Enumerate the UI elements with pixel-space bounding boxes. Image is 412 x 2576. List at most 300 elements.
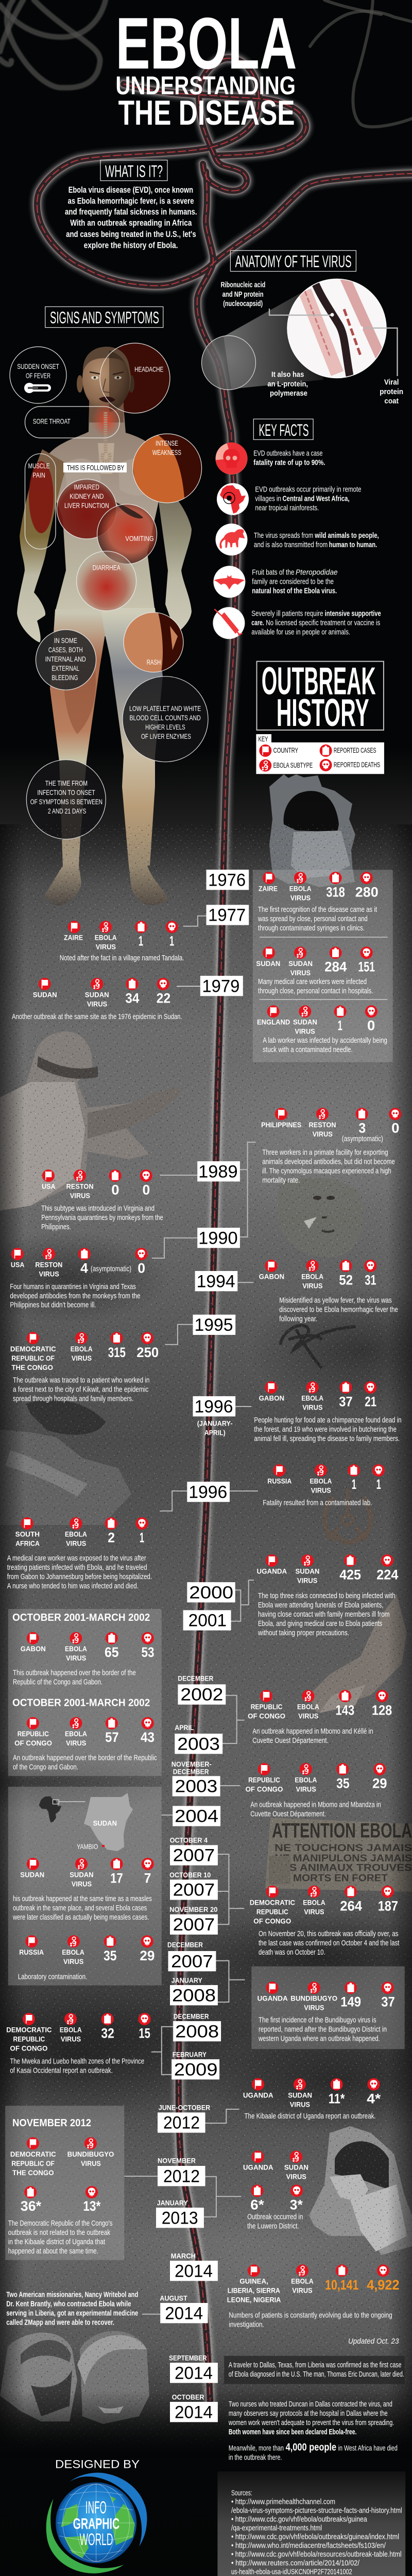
- entry: Zaire 1976: 318: [326, 885, 345, 900]
- icon: bat: [213, 566, 245, 598]
- fact: fatality rate: [253, 449, 325, 467]
- year: September 2014: SEPTEMBER: [169, 2353, 207, 2362]
- entry: Republic of Congo 2002-2003: Cuvette Ouest Département.: [252, 1737, 329, 1745]
- entry: Zaire 1977: EBOLA: [95, 934, 117, 942]
- photo: attention ebola sign: NE TOUCHONS JAMAIS: [274, 1843, 412, 1854]
- entry: DRC 2008-2009: VIRUS: [61, 2035, 81, 2043]
- heading: signs and symptoms: SIGNS AND SYMPTOMS: [50, 308, 159, 327]
- entry: Republic of Congo 2001: EBOLA: [65, 1730, 87, 1738]
- entry: DRC 1995: THE CONGO: [11, 1363, 53, 1371]
- connector 2004: [162, 1815, 173, 1816]
- entry: Russia 1996: EBOLA: [310, 1477, 332, 1485]
- year: June-October 2012: 2012: [163, 2113, 200, 2133]
- entry: Gabon 2001: [12, 1612, 154, 1686]
- symptom: muscle pain: PAIN: [32, 471, 45, 479]
- entry: DRC 2007: EBOLA: [303, 1898, 325, 1906]
- entry: England 1976: VIRUS: [295, 1027, 315, 1035]
- entry: USA 1990: VIRUS: [39, 1270, 59, 1278]
- callout: nucleocapsid: and NP protein: [222, 290, 264, 299]
- symptom: bleeding: BLEEDING: [52, 673, 78, 682]
- panel: November 2012 DRC: happened at about the same time.: [8, 2247, 98, 2256]
- entry: Uganda 2000-2001: SUDAN: [296, 1567, 319, 1575]
- logo: info graphic world: INFO: [85, 2498, 107, 2517]
- fact: fruit bats: Fruit bats of the: [252, 568, 294, 577]
- entry: Sudan 2004: VIRUS: [72, 1879, 92, 1888]
- entry: Zaire 1977: VIRUS: [96, 943, 116, 951]
- entry: Republic of Congo 2001: VIRUS: [66, 1739, 86, 1747]
- throat and trachea: [92, 402, 121, 461]
- entry: Uganda November 2012: [243, 2150, 308, 2230]
- year: December 2008: 2008: [175, 2022, 219, 2041]
- entry: Republic of Congo 2002-2003: VIRUS: [298, 1711, 318, 1720]
- entry: DRC 2008-2009: The Mweka and Luebo health zones of the Province: [10, 2057, 144, 2065]
- year: January 2008: 2008: [172, 1986, 216, 2005]
- entry: Republic of Congo 2001: 57: [105, 1730, 119, 1745]
- entry: USA 1989: RESTON: [66, 1182, 94, 1191]
- entry: October 2014 nurses: [228, 2400, 398, 2462]
- big circle outline: [287, 279, 386, 378]
- symptom: diarrhea: [77, 551, 136, 611]
- fact: supportive care: available for use in people or animals.: [251, 628, 350, 636]
- entry: Republic of Congo 2001: REPUBLIC: [18, 1730, 49, 1738]
- entry: DRC 2007: 187: [378, 1898, 398, 1913]
- entry: Uganda June-October 2012: UGANDA: [243, 2091, 273, 2099]
- entry: DRC 1995: DEMOCRATIC: [10, 1345, 56, 1353]
- entry: West Africa March 2014: VIRUS: [292, 2286, 313, 2295]
- entry: Republic of Congo Nov-Dec 2003: 35: [336, 1775, 350, 1791]
- fact: central and west africa: [255, 485, 362, 512]
- connector 2007: [218, 1854, 244, 1924]
- entry: Philippines 1989: (asymptomatic): [342, 1135, 383, 1143]
- entry: Sudan 1976: VIRUS: [290, 969, 311, 977]
- entry: Gabon 1996: EBOLA: [301, 1394, 323, 1402]
- entry: Gabon 1994: [259, 1260, 398, 1323]
- entry: USA 1989: USA: [42, 1182, 56, 1191]
- panel: Uganda Bundibugyo 2007-2008: [251, 1967, 405, 2049]
- logo: info graphic world: [46, 2473, 147, 2573]
- entry: DRC 1995: 315: [108, 1345, 126, 1360]
- entry: Zaire 1977: 1: [169, 934, 174, 949]
- entry: Zaire 1976: ZAIRE: [259, 884, 278, 892]
- symptom: bleeding: EXTERNAL: [52, 664, 79, 672]
- entry: DRC 1995: [10, 1332, 159, 1403]
- panel: anatomy of the virus: [202, 250, 403, 405]
- entry: West Africa March 2014: LEONE, NIGERIA: [227, 2296, 281, 2304]
- entry: DRC 2007: death was on October 10.: [259, 1948, 325, 1957]
- entry: South Africa 1996: VIRUS: [66, 1539, 86, 1548]
- symptom: bleeding: IN SOME: [54, 636, 77, 645]
- panel: October 2001 to March 2002: [8, 1609, 162, 1776]
- symptom: intense weakness: INTENSE: [156, 439, 178, 447]
- photo: attention ebola sign: LES ANIMAUX TROUVES: [274, 1863, 412, 1874]
- icon: africa map: [217, 483, 249, 515]
- year: 1996 January-April: APRIL): [204, 1428, 226, 1436]
- heading: key facts: KEY FACTS: [259, 421, 309, 439]
- connector 1996 both sides: [160, 1491, 258, 1511]
- entry: Republic of Congo 2002-2003: 143: [336, 1702, 354, 1718]
- year: 2004: 2004: [175, 1807, 218, 1826]
- entry: England 1976: 0: [367, 1018, 375, 1033]
- entry: Gabon 2001: Republic of the Congo and Gabon.: [13, 1678, 102, 1686]
- entry: South Africa 1996: EBOLA: [65, 1530, 87, 1538]
- icon: syringe: [213, 607, 245, 639]
- year: 1977: 1977: [208, 906, 246, 925]
- fact: fatality rate: fatality rate of up to 90%.: [253, 458, 325, 467]
- entry: Republic of Congo 2002-2003: OF CONGO: [248, 1711, 285, 1720]
- year: October 2014: 2014: [175, 2402, 213, 2422]
- year: August 2014: 2014: [165, 2303, 203, 2323]
- entry: USA 1989: 0: [111, 1182, 119, 1197]
- entry: Philippines 1989: PHILIPPINES: [261, 1121, 301, 1129]
- entry: Republic of Congo Nov-Dec 2003: 29: [372, 1775, 387, 1791]
- year: November-December 2003: [171, 1760, 220, 1797]
- intro text: as Ebola hemorrhagic fever, is a severe: [68, 196, 194, 206]
- entry: Uganda 2000-2001: without taking proper precautions.: [258, 1629, 349, 1637]
- symptom: vomiting: [97, 502, 157, 564]
- heading: designed by: DESIGNED BY: [55, 2458, 140, 2471]
- entry: South Africa 1996: treating patients infected with Ebola, and he traveled: [7, 1564, 147, 1572]
- fact: wild animals: and is also transmitted from: [254, 540, 328, 549]
- year: December 2007: [167, 1940, 216, 1971]
- entry: USA 1989: Pennsylvania quarantines by monkeys from the: [41, 1214, 163, 1222]
- entry: USA 1989: This subtype was introduced in Virginia and: [41, 1205, 154, 1213]
- year: December 2002: [178, 1674, 226, 1705]
- connector 2007-2008: [216, 1961, 245, 2002]
- legend: key: [256, 734, 384, 774]
- entry: Uganda 2000-2001: Ebola were attending funerals of Ebola patients,: [258, 1601, 383, 1609]
- entry: Republic of Congo Nov-Dec 2003: VIRUS: [296, 1785, 316, 1793]
- entry: Republic of Congo 2002-2003: 128: [372, 1702, 392, 1718]
- symptom: incubation time: THE TIME FROM: [45, 779, 88, 787]
- symptom: intense weakness: [132, 433, 202, 503]
- panel: November 2012 DRC: in the Kibaale district of Uganda that: [8, 2238, 105, 2246]
- entry: Sudan 2004: 7: [144, 1870, 151, 1886]
- entry: Sudan 1979: SUDAN: [85, 990, 109, 998]
- entry: Sudan 2004: SUDAN: [20, 1870, 44, 1878]
- year: April 2003: 2003: [177, 1734, 220, 1754]
- year: January 2008: [170, 1976, 218, 2005]
- panel: November 2012 DRC: The Democratic Republic of the Congo's: [8, 2219, 112, 2228]
- icon: thermometer: [24, 383, 51, 393]
- entry: Zaire 1976: [258, 872, 379, 933]
- entry: Uganda June-October 2012: VIRUS: [290, 2100, 310, 2108]
- intro text: With an outbreak spreading in Africa: [70, 218, 192, 228]
- entry: Zaire 1976: was spread by close, personal contact and: [258, 915, 368, 923]
- symptom: impaired kidney and liver function: KIDNEY AND: [70, 492, 104, 500]
- panel: Uganda Bundibugyo 2007-2008: western Uganda where an outbreak happened.: [258, 2035, 380, 2043]
- entry: Gabon 2001: 53: [141, 1645, 154, 1660]
- entry: Zaire 1976: The first recognition of the disease came as it: [258, 906, 377, 914]
- symptom: sudden onset of fever: SUDDEN ONSET: [17, 362, 59, 370]
- entry: DRC 2007: 264: [340, 1898, 362, 1913]
- entry: Sudan 2004: 17: [110, 1870, 123, 1886]
- entry: South Africa 1996: 1: [140, 1530, 144, 1546]
- entry: Sudan 1979: SUDAN: [33, 990, 57, 998]
- entry: DRC 1995: a forest next to the city of Kikwit, and the epidemic: [13, 1385, 148, 1394]
- year: December 2002: DECEMBER: [178, 1674, 213, 1683]
- symptom: impaired kidney and liver function: [57, 479, 116, 539]
- entry: Philippines 1989: 3: [358, 1121, 366, 1136]
- entry: Russia 2004: VIRUS: [63, 1957, 83, 1965]
- symptom: low platelet counts: [123, 676, 208, 762]
- panel: November 2012 DRC: VIRUS: [81, 2159, 101, 2167]
- panel: November 2012 DRC: 36*: [21, 2198, 42, 2214]
- entry: Gabon 2001: EBOLA: [65, 1645, 87, 1653]
- connector 2002-2003: [222, 1696, 244, 1743]
- entry: Philippines 1989: mortality rate.: [262, 1177, 300, 1185]
- entry: USA 1990: (asymptomatic): [91, 1265, 131, 1274]
- entry: DRC 1995: REPUBLIC OF: [11, 1354, 55, 1362]
- entry: West Africa March 2014: investigation.: [229, 2320, 264, 2329]
- panel: Dallas traveler September 2014: [224, 2356, 405, 2384]
- year: November 20 2007: NOVEMBER 20: [169, 1905, 218, 1913]
- entry: Sudan 2004: SUDAN: [70, 1870, 94, 1878]
- panel: Uganda Bundibugyo 2007-2008: VIRUS: [304, 2004, 324, 2012]
- title: EBOLA: [115, 3, 297, 84]
- panel: November 2012 DRC: BUNDIBUGYO: [67, 2150, 114, 2158]
- entry: USA 1990: developed antibodies from the monkeys from the: [10, 1292, 141, 1300]
- callout: viral protein coat: Viral: [384, 378, 399, 387]
- symptom: low platelet counts: OF LIVER ENZYMES: [141, 732, 191, 740]
- entry: October 2014 nurses: Meanwhile, more than: [229, 2444, 284, 2452]
- entry: Uganda 2000-2001: UGANDA: [256, 1567, 287, 1575]
- entry: DRC 2007: [250, 1886, 400, 1957]
- logo: info graphic world: WORLD: [80, 2530, 113, 2549]
- year: November-December 2003: DECEMBER: [173, 1767, 209, 1775]
- symptom: sore throat: [25, 406, 119, 438]
- entry: Sudan 1979: Another outbreak at the same site as the 1976 epidemic in Sudan.: [12, 1013, 182, 1021]
- year: November 2012: NOVEMBER: [158, 2157, 196, 2165]
- year: 1989: 1989: [198, 1162, 238, 1181]
- callout: L-protein: an L-protein,: [267, 380, 308, 388]
- fact: central and west africa: villages in: [255, 494, 281, 503]
- entry: Zaire 1976: EBOLA: [289, 884, 312, 892]
- entry: Sudan 1979: 22: [157, 991, 170, 1006]
- year: February 2009: FEBRUARY: [173, 2050, 207, 2058]
- year: 2000: 2000: [189, 1583, 233, 1602]
- symptom: incubation time: INFECTION TO ONSET: [37, 788, 95, 796]
- year: 1996: 1996: [188, 1482, 227, 1502]
- entry: Uganda June-October 2012: SUDAN: [288, 2091, 312, 2099]
- year: 1994: 1994: [197, 1272, 235, 1291]
- callout: viral protein coat: coat: [384, 397, 399, 405]
- entry: American missionaries August 2014: Dr. Kent Brantly, who contracted Ebola while: [6, 2300, 131, 2308]
- year: March 2014: [170, 2251, 218, 2281]
- entry: DRC 1995: 250: [136, 1345, 159, 1360]
- fact: supportive care: intensive supportive: [325, 609, 381, 618]
- entry: Uganda June-October 2012: 4*: [367, 2091, 381, 2106]
- year: October 4 2007: [170, 1836, 218, 1866]
- entry: Sudan 1976: 151: [358, 959, 375, 975]
- year: 2001: 2001: [188, 1611, 227, 1631]
- fact: wild animals: wild animals to people,: [314, 531, 379, 540]
- symptom: incubation time: [26, 760, 106, 839]
- callout: nucleocapsid: [221, 280, 334, 316]
- entry: Russia 1996: Fatality resulted from a contaminated lab.: [263, 1499, 372, 1507]
- entry: Republic of Congo 2002-2003: EBOLA: [297, 1702, 319, 1710]
- entry: Russia 2004: Laboratory contamination.: [18, 1973, 87, 1981]
- entry: England 1976: SUDAN: [293, 1018, 317, 1026]
- year: October 4 2007: OCTOBER 4: [170, 1836, 208, 1844]
- entry: Zaire 1977: [60, 921, 184, 962]
- entry: Uganda 2000-2001: 224: [376, 1567, 398, 1582]
- legend: key: REPORTED DEATHS: [334, 760, 380, 769]
- entry: American missionaries August 2014: [6, 2291, 138, 2327]
- entry: DRC 2007: OF CONGO: [253, 1917, 291, 1925]
- year: November 2012: [158, 2157, 205, 2186]
- photo: hazmat worker, right: [309, 2126, 412, 2255]
- heading: signs and symptoms: [45, 307, 163, 328]
- entry: West Africa March 2014: GUINEA,: [239, 2277, 268, 2285]
- symptom: low platelet counts: BLOOD CELL COUNTS AND: [130, 714, 201, 722]
- year: 1995: 1995: [195, 1315, 233, 1335]
- panel: signs and symptoms: [10, 307, 208, 906]
- entry: Sudan 1976: Many medical care workers were infected: [258, 978, 367, 986]
- callout: nucleocapsid: Ribonucleic acid: [221, 280, 265, 289]
- panel: sources: • http://www.cdc.gov/vhf/ebola/outbreaks/guinea: [231, 2516, 368, 2524]
- credit: designed by: [33, 2458, 161, 2576]
- entry: DRC 2008-2009: of Kasai Occidental report an outbreak.: [10, 2066, 113, 2075]
- entry: USA 1990: 4: [80, 1261, 88, 1276]
- entry: West Africa March 2014: 10,141: [325, 2277, 358, 2293]
- entry: DRC 1995: The outbreak was traced to a patient who worked in: [13, 1376, 149, 1384]
- entry: Zaire 1977: 1: [139, 934, 143, 949]
- entry: Sudan 1976: SUDAN: [256, 959, 280, 968]
- magnifier cone: [224, 292, 323, 389]
- panel: November 2012 DRC: THE CONGO: [12, 2168, 54, 2177]
- entry: Zaire 1977: Noted after the fact in a village named Tandala.: [60, 954, 184, 962]
- entry: South Africa 1996: AFRICA: [15, 1539, 40, 1548]
- entry: Gabon 1996: 37: [339, 1394, 353, 1409]
- entry: Zaire 1976: through contaminated syringes in clinics.: [258, 924, 365, 933]
- entry: South Africa 1996: A medical care worker was exposed to the virus after: [7, 1554, 146, 1563]
- entry: Russia 1996: 1: [352, 1477, 356, 1492]
- entry: Republic of Congo 2001: [12, 1697, 157, 1771]
- connector November 2012 right: [204, 2177, 241, 2217]
- entry: USA 1990: Four humans in quarantines in Virginia and Texas: [10, 1283, 136, 1291]
- symptom: incubation time: 2 AND 21 DAYS: [48, 807, 86, 815]
- entry: October 2014 nurses: Both women have since been declared Ebola-free.: [229, 2428, 356, 2436]
- fact: fatality rate: EVD outbreaks have a case: [253, 449, 322, 457]
- panel: Uganda Bundibugyo 2007-2008: The first incidence of the Bundibugyo virus is: [259, 2016, 376, 2025]
- connector 1990: [152, 1238, 197, 1258]
- year: December 2002: 2002: [180, 1685, 223, 1705]
- intro text: and cases being treated in the U.S., let's: [66, 229, 196, 239]
- symptom: bleeding: CASES, BOTH: [48, 646, 83, 654]
- text label: this is followed by: [63, 463, 127, 472]
- heading: what is it: [100, 160, 167, 181]
- entry: Republic of Congo 2001: of the Congo and Gabon.: [13, 1763, 78, 1771]
- entry: West Africa March 2014: Updated Oct. 23: [348, 2337, 399, 2346]
- faint virus strands, top corners: [0, 0, 412, 127]
- connector 1989-1990 right: [240, 1142, 255, 1237]
- entry: Gabon 1996: VIRUS: [302, 1403, 322, 1411]
- year: December 2008: [173, 2012, 221, 2041]
- fact: fruit bats: natural host of the Ebola virus.: [252, 586, 337, 595]
- symptom: intense weakness: WEAKNESS: [152, 448, 181, 456]
- year: 1996 January-April: [193, 1396, 235, 1436]
- entry: Gabon 2001: VIRUS: [66, 1654, 86, 1662]
- legend: key: REPORTED CASES: [334, 746, 376, 754]
- year: November 20 2007: 2007: [173, 1915, 215, 1935]
- entry: USA 1990: USA: [11, 1261, 24, 1269]
- entry: England 1976: 1: [338, 1018, 342, 1033]
- year: January 2008: JANUARY: [171, 1976, 202, 1984]
- year: January 2013: [156, 2199, 204, 2228]
- year: October 10 2007: OCTOBER 10: [169, 1871, 211, 1879]
- panel: November 2012 DRC: DEMOCRATIC: [10, 2150, 56, 2158]
- entry: Russia 2004: 29: [140, 1948, 154, 1963]
- magnifier lens on strand: [202, 336, 255, 389]
- entry: USA 1989: 0: [142, 1182, 150, 1197]
- entry: Gabon 2001: GABON: [21, 1645, 46, 1653]
- panel: November 2012 DRC: REPUBLIC OF: [11, 2159, 55, 2167]
- heading: outbreak history: [256, 659, 384, 734]
- headache circle backing: [100, 343, 170, 413]
- year: September 2014: 2014: [175, 2363, 213, 2383]
- entry: Republic of Congo 2002-2003: [248, 1690, 392, 1745]
- year: October 2014: OCTOBER: [172, 2393, 204, 2401]
- entry: South Africa 1996: 2: [108, 1530, 115, 1546]
- intro text: [65, 185, 197, 250]
- entry: England 1976: ENGLAND: [257, 1018, 290, 1026]
- entry: Sudan 1979: VIRUS: [87, 999, 107, 1008]
- entry: Gabon 2001: OCTOBER 2001-MARCH 2002: [12, 1612, 150, 1623]
- entry: Gabon 2001: 65: [105, 1645, 119, 1660]
- photo: attention ebola sign: NE MANIPULONS JAMAIS: [274, 1853, 412, 1864]
- entry: Zaire 1976: 280: [355, 885, 379, 900]
- entry: Philippines 1989: [261, 1108, 401, 1185]
- connector Nov 2003: [220, 1785, 240, 1786]
- entry: Philippines 1989: RESTON: [309, 1121, 336, 1129]
- symptom: incubation time: OF SYMPTOMS IS BETWEEN: [30, 798, 102, 806]
- entry: Republic of Congo Nov-Dec 2003: OF CONGO: [245, 1785, 283, 1793]
- fact: central and west africa: Central and West Africa,: [282, 494, 350, 503]
- panel: November 2012 DRC: outbreak is not related to the outbreak: [8, 2229, 111, 2237]
- entry: DRC 1995: EBOLA: [71, 1345, 93, 1353]
- entry: Sudan 1976: SUDAN: [288, 959, 313, 968]
- bottom fade: [0, 2391, 412, 2458]
- entry: Russia 2004: EBOLA: [62, 1948, 84, 1956]
- year: December 2007: DECEMBER: [167, 1940, 203, 1948]
- entry: South Africa 1996: A nurse who tended to him was infected and died.: [7, 1582, 139, 1590]
- entry: Gabon 1994: GABON: [259, 1272, 284, 1280]
- panel: Uganda Bundibugyo 2007-2008: BUNDIBUGYO: [290, 1994, 337, 2003]
- symptom: diarrhea: DIARRHEA: [93, 564, 121, 572]
- entry: DRC 2008-2009: OF CONGO: [10, 2044, 47, 2053]
- entry: DRC 2007: VIRUS: [304, 1907, 324, 1916]
- entry: Sudan 2004: his outbreak happened at the same time as a measles: [13, 1895, 152, 1903]
- entry: Republic of Congo 2001: An outbreak happened over the border of the Republic: [13, 1754, 157, 1762]
- year: December 2008: DECEMBER: [174, 2012, 209, 2020]
- entry: Uganda November 2012: 3*: [290, 2197, 303, 2212]
- entry: Uganda June-October 2012: The Kibaale district of Uganda report an outbreak.: [244, 2112, 376, 2121]
- entry: Philippines 1989: 0: [391, 1121, 400, 1136]
- panel: sources: • http://www.reuters.com/article/2014/10/02/: [231, 2560, 360, 2568]
- entry: USA 1990: Philippines but didn't become ill.: [10, 1301, 96, 1309]
- entry: DRC 2008-2009: 32: [101, 2026, 114, 2041]
- legend: key: KEY: [259, 735, 268, 743]
- connector 1979: [177, 986, 200, 987]
- entry: Sudan 1976: [256, 946, 375, 995]
- entry: Republic of Congo Nov-Dec 2003: An outbreak happened in Mbomo and Mbandza in: [250, 1801, 381, 1809]
- title: UNDERSTANDING: [115, 71, 296, 100]
- entry: Uganda November 2012: UGANDA: [243, 2163, 273, 2172]
- year: 1979: 1979: [202, 976, 239, 996]
- year: March 2014: 2014: [175, 2261, 213, 2281]
- entry: USA 1990: 0: [138, 1261, 145, 1276]
- timeline year markers: [156, 870, 249, 2422]
